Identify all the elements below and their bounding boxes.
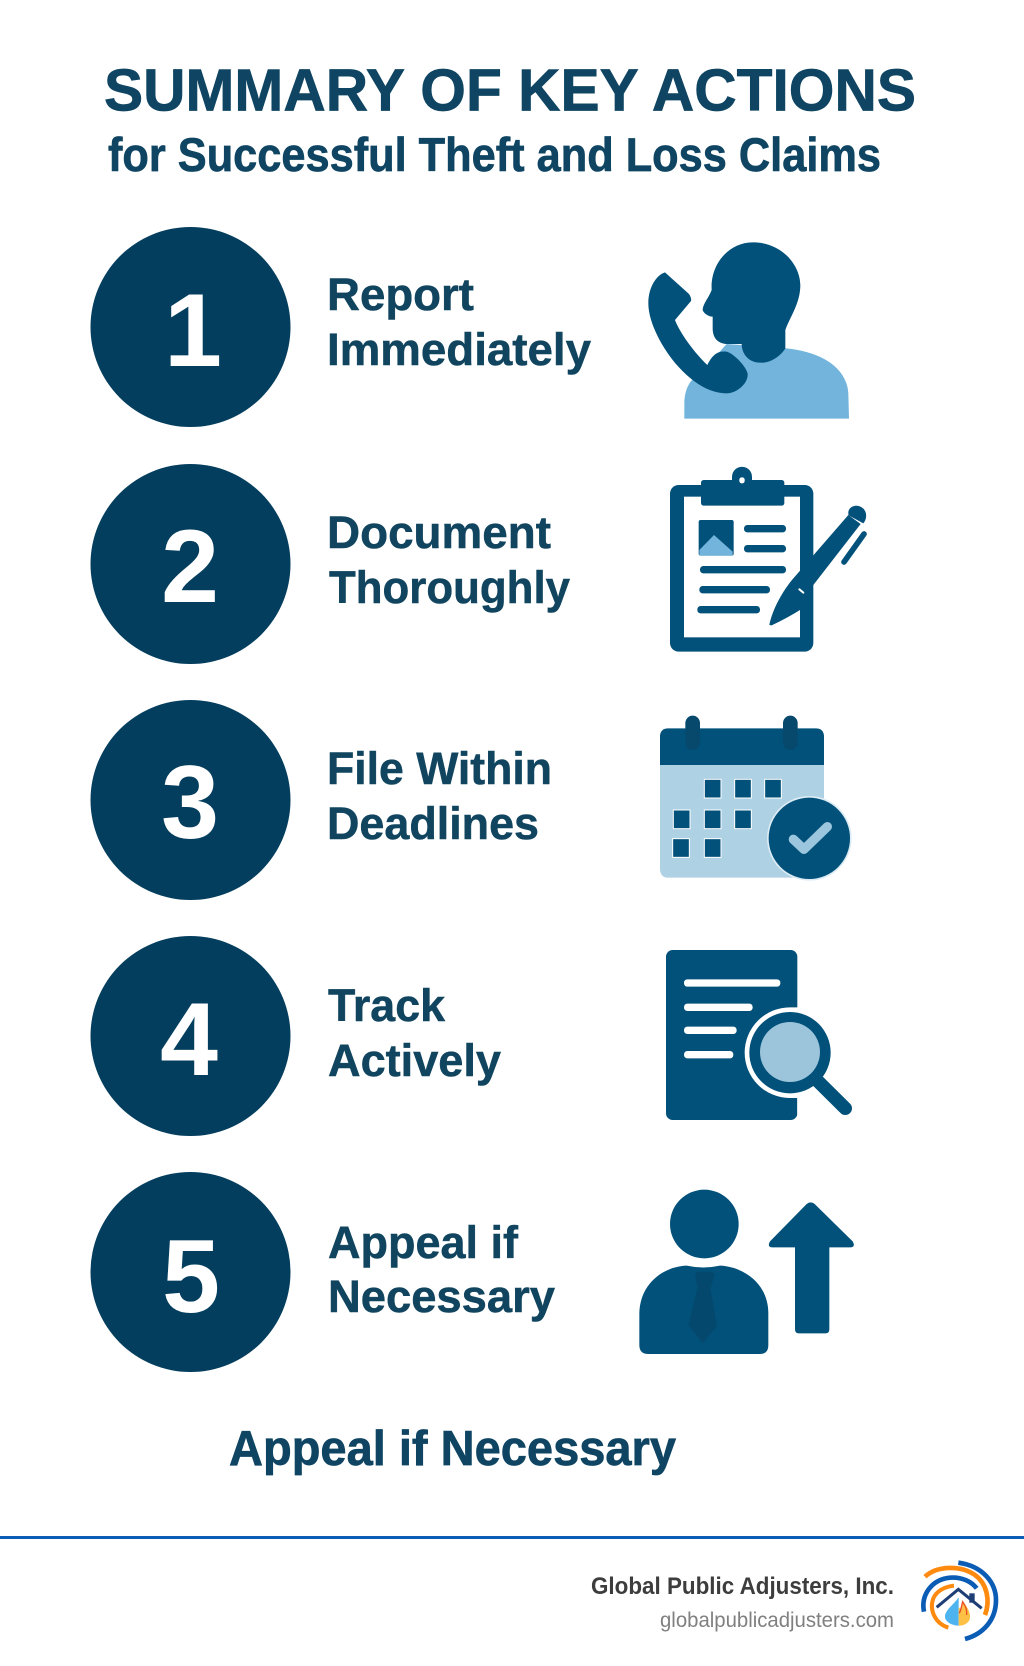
number badge 1: 1: [164, 273, 222, 389]
icon: calendar with check: [660, 716, 852, 881]
step 4 label: Actively: [328, 1035, 501, 1086]
icon: company logo: [923, 1563, 996, 1639]
step 2 label: Thoroughly: [329, 562, 570, 613]
step 4: track actively: [90, 936, 854, 1136]
step 5 label: Appeal if: [328, 1217, 519, 1268]
step 1: report immediately: [90, 227, 849, 427]
footer website: globalpublicadjusters.com: [660, 1609, 894, 1632]
number badge 4: 4: [160, 982, 218, 1098]
step 3 label: File Within: [327, 743, 552, 794]
step 2: document thoroughly: [90, 464, 866, 664]
step 1 label: Report: [327, 269, 474, 320]
number badge 5: 5: [162, 1219, 220, 1335]
caption: Appeal if Necessary: [229, 1422, 676, 1476]
step 4 label: [328, 980, 501, 1086]
step 1 label: Immediately: [327, 324, 591, 375]
step 5 label: [328, 1217, 555, 1322]
step 3 label: Deadlines: [327, 798, 539, 849]
step 5: appeal if necessary: [90, 1172, 854, 1372]
title: SUMMARY OF KEY ACTIONS: [104, 58, 916, 124]
number badge 2: 2: [161, 509, 219, 625]
icon: person on phone: [648, 242, 849, 419]
icon: document with magnifier: [666, 950, 854, 1122]
footer rule: [0, 1536, 1024, 1539]
step 2 label: [327, 507, 570, 613]
step 5 label: Necessary: [328, 1271, 555, 1322]
step 4 label: Track: [328, 980, 446, 1031]
number badge 3: 3: [161, 745, 219, 861]
number badge 2: [90, 464, 290, 664]
step 3 label: [327, 743, 552, 849]
number badge 3: [90, 700, 290, 900]
number badge 1: [90, 227, 290, 427]
icon: clipboard and pen: [670, 467, 866, 652]
step 2 label: Document: [327, 507, 551, 558]
step 3: file within deadlines: [90, 700, 852, 900]
subtitle: for Successful Theft and Loss Claims: [108, 128, 881, 181]
footer company name: Global Public Adjusters, Inc.: [591, 1573, 894, 1600]
step 1 label: [327, 269, 591, 375]
icon: person with up arrow: [639, 1190, 854, 1354]
number badge 5: [90, 1172, 290, 1372]
number badge 4: [90, 936, 290, 1136]
